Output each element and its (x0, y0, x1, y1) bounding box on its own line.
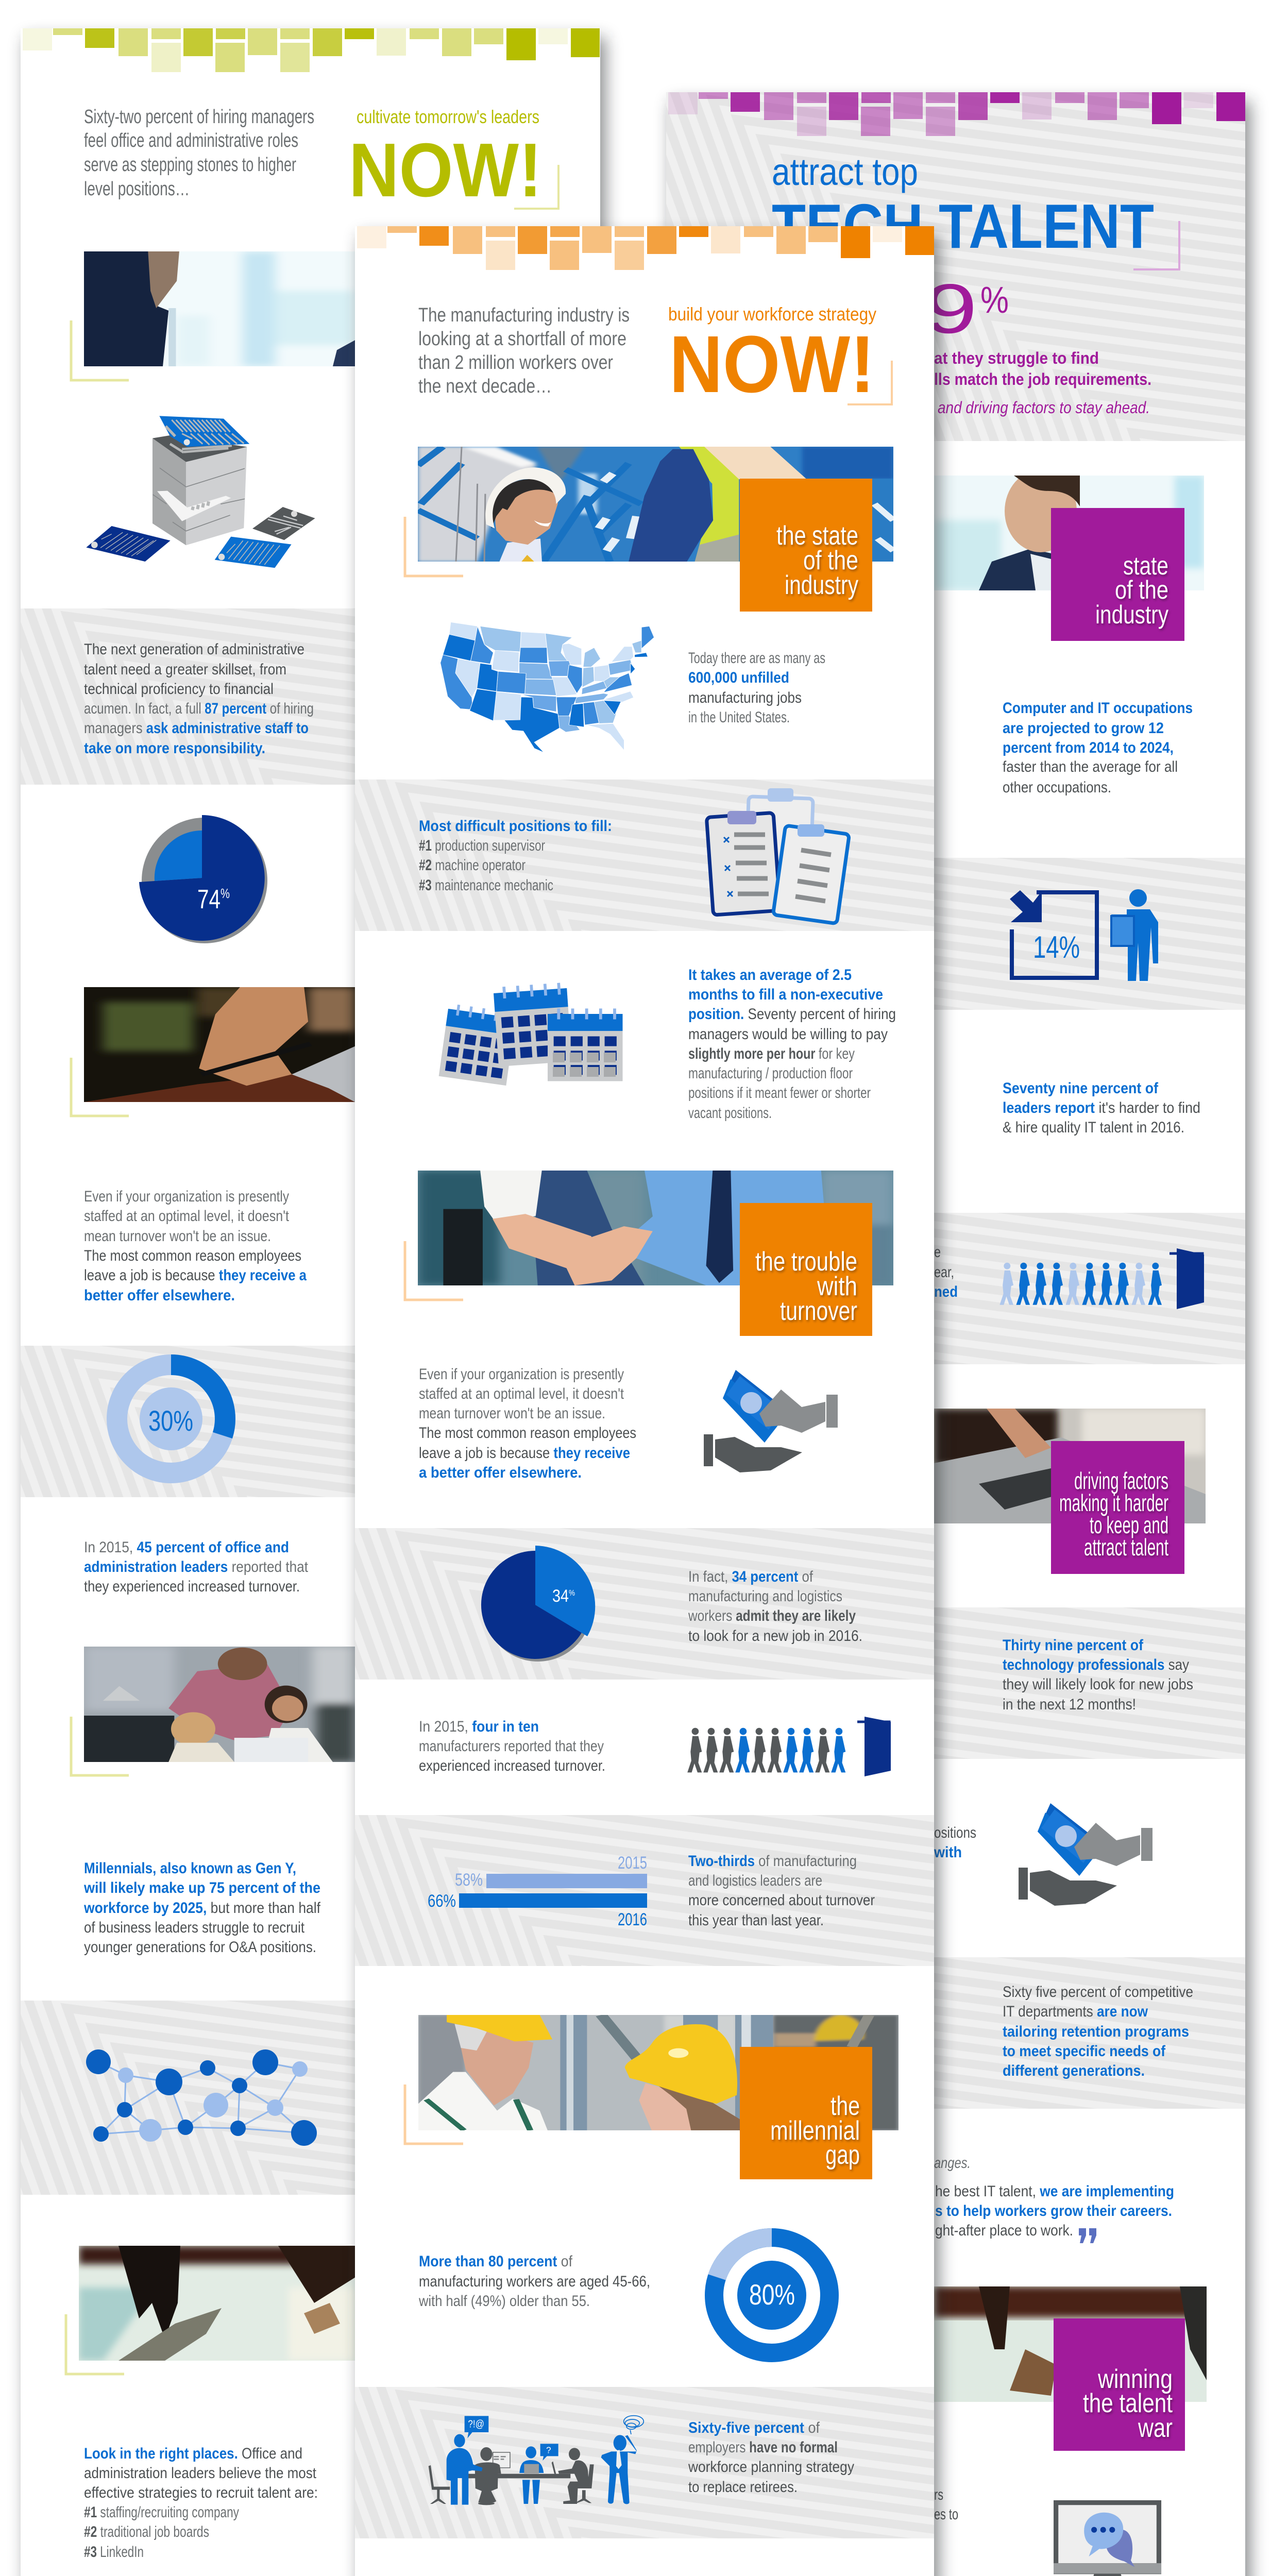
photo: worker with hard hat (418, 447, 893, 562)
text: IT occupations: percent from 2014 to 2024, (1003, 739, 1174, 756)
text: increased turnover: they experienced increased turnover. (84, 1578, 300, 1595)
section box: state of the industry: of the (1115, 575, 1168, 604)
text: purple intro fragments: lls match the job requirements. (934, 370, 1151, 388)
text: fragments beside monitor: es to (934, 2506, 958, 2523)
intro text: level positions… (84, 178, 190, 200)
intro text (418, 304, 630, 397)
text: millennials: younger generations for O&A positions. (84, 1939, 316, 1956)
panel: sixty-five percent no plan (355, 2387, 934, 2538)
text: IT occupations: Computer and IT occupations (1003, 700, 1193, 717)
stat: 89 percent: % (980, 280, 1009, 321)
section box: driving factors: making it harder (1059, 1489, 1168, 1516)
panel: sixty five percent: to meet specific needs of (1003, 2043, 1166, 2060)
text: time to fill: It takes an average of 2.5 (688, 967, 852, 984)
quote fragments (934, 2155, 1174, 2243)
text: turnover reason: The most common reason employees (84, 1247, 301, 1264)
text: look in the right places: #3 LinkedIn (84, 2544, 144, 2561)
section box: the state of the industry (740, 479, 872, 612)
pie chart: 74 percent: 74 (197, 885, 227, 914)
text: turnover reason: leave a job is because they receive (419, 1445, 630, 1462)
section box: the state of the industry: of the (803, 546, 858, 575)
bar chart: 2015 vs 2016: 2015 (618, 1853, 647, 1873)
intro text: serve as stepping stones to higher (84, 154, 296, 176)
stat: 89 percent: 89 (871, 269, 977, 348)
text: time to fill: vacant positions. (688, 1105, 772, 1122)
panel: people walking out: ned (934, 1283, 958, 1300)
pie chart: 74 percent (139, 815, 267, 943)
text: more than 80 percent: More than 80 percent of (419, 2253, 573, 2270)
section box: the state of the industry: the state (776, 521, 858, 551)
panel: 34 percent pie: In fact, 34 percent of (688, 1568, 814, 1585)
panel: 34 percent pie: manufacturing and logistics (688, 1588, 842, 1605)
pie chart: 34 percent (481, 1546, 595, 1662)
panel: 34 percent pie: to look for a new job in 2016. (688, 1628, 862, 1645)
icon: US map (440, 622, 654, 752)
heading: cultivate tomorrow's leaders NOW: NOW! (349, 128, 542, 213)
corner bracket (71, 1717, 129, 1775)
corner bracket (405, 1241, 463, 1300)
panel: two-thirds concern: and logistics leaders are (688, 1872, 822, 1889)
icon: workers walking out the door (687, 1717, 891, 1776)
text: turnover reason: The most common reason employees (419, 1425, 636, 1442)
panel: most difficult positions: #1 production supervisor (419, 837, 545, 854)
text: turnover reason: mean turnover won't be an issue. (84, 1228, 271, 1245)
text: 600,000 unfilled jobs (688, 650, 825, 726)
text: four in ten (419, 1718, 605, 1774)
text: seventy nine percent: Seventy nine percent of (1003, 1080, 1159, 1097)
text: purple intro fragments (934, 349, 1151, 417)
text: four in ten: experienced increased turnover. (419, 1757, 605, 1774)
icon: man with box (1111, 889, 1158, 981)
text: turnover reason: leave a job is because they receive a (84, 1267, 307, 1284)
text: time to fill: manufacturing / production floor (688, 1065, 853, 1082)
poster sheet (666, 92, 1245, 2576)
intro text: feel office and administrative roles (84, 130, 298, 151)
text: purple intro fragments: and driving factors to stay ahead. (938, 398, 1150, 417)
photo: laptop (934, 1409, 1206, 1523)
quote fragments: s to help workers grow their careers. (935, 2202, 1172, 2219)
text: fragments beside hands icon: with (934, 1844, 962, 1861)
donut chart: 80 percent (714, 2238, 829, 2353)
intro text: than 2 million workers over (418, 352, 613, 374)
icon: team meeting (429, 2416, 643, 2505)
section box: driving factors: attract talent (1084, 1534, 1168, 1561)
text: look in the right places: administration leaders believe the most (84, 2465, 317, 2482)
panel: 34 percent pie: workers admit they are likely (688, 1607, 856, 1624)
corner bracket (405, 2084, 463, 2144)
text: fragments beside monitor: rs (934, 2486, 943, 2503)
panel: two-thirds concern: this year than last year. (688, 1912, 824, 1929)
section box: the trouble with turnover: turnover (780, 1296, 857, 1326)
photo: handshake (418, 1171, 893, 1285)
pie chart: 34 percent: % (569, 1589, 575, 1598)
corner bracket (848, 361, 892, 404)
text: time to fill: positions if it meant fewer or shorter (688, 1084, 871, 1101)
text: seventy nine percent: & hire quality IT talent in 2016. (1003, 1119, 1184, 1136)
poster shadow (671, 101, 1250, 2576)
corner bracket (71, 320, 129, 380)
text: turnover reason: a better offer elsewhere. (419, 1464, 582, 1481)
panel: most difficult positions: #2 machine operator (419, 857, 526, 874)
icon: paper stack (86, 416, 315, 568)
corner bracket (1133, 221, 1179, 269)
photo: businessman (934, 476, 1204, 590)
text: turnover reason: better offer elsewhere. (84, 1287, 235, 1304)
text: look in the right places: effective strategies to recruit talent are: (84, 2484, 318, 2501)
panel: thirty nine percent (666, 1607, 1245, 1759)
photo: man at window (84, 251, 355, 366)
pie chart: 34 percent: 34 (552, 1586, 572, 1606)
panel: sixty-five percent no plan: Sixty-five percent of (688, 2419, 820, 2436)
panel: next generation skillset: The next generation of administrative (84, 641, 304, 658)
photo: hand on desk (84, 987, 355, 1102)
text: 600,000 unfilled jobs: in the United States. (688, 709, 790, 726)
text: fragments beside hands icon: ositions (934, 1824, 976, 1841)
panel: next generation skillset: technical proficiency to financial (84, 681, 274, 698)
section box: driving factors (1051, 1441, 1184, 1574)
panel: striped header (666, 92, 1245, 441)
corner bracket (71, 1058, 129, 1116)
text: turnover reason (84, 1188, 307, 1304)
icon: walking people (999, 1248, 1204, 1309)
panel: 14 percent (666, 858, 1245, 1010)
intro text: The manufacturing industry is (418, 304, 630, 326)
panel: sixty five percent (666, 1957, 1245, 2109)
panel: next generation skillset: managers ask administrative staff to (84, 720, 309, 737)
panel: centre poster, manufacturing (355, 226, 939, 2576)
bar chart: 2015 vs 2016: 58% (455, 1870, 483, 1890)
text: four in ten: manufacturers reported that they (419, 1738, 604, 1755)
text: time to fill: slightly more per hour for key (688, 1045, 855, 1062)
text: time to fill: position. Seventy percent of hiring (688, 1006, 896, 1023)
text: more than 80 percent (418, 2253, 650, 2310)
text: IT occupations: faster than the average for all (1003, 758, 1178, 775)
panel: sixty-five percent no plan: employers have no formal (688, 2439, 838, 2456)
intro text: Sixty-two percent of hiring managers (84, 106, 314, 128)
heading: attract top tech talent: attract top (772, 150, 918, 193)
heading: build your workforce strategy NOW: NOW! (669, 319, 875, 410)
text: millennials (83, 1860, 321, 1956)
panel: thirty nine percent: technology professionals say (1003, 1656, 1189, 1673)
panel: two-thirds concern (355, 1815, 934, 1966)
donut chart: 80 percent: 80% (749, 2278, 795, 2311)
header squares: purple (668, 92, 1245, 136)
panel: most difficult positions: #3 maintenance mechanic (419, 877, 553, 894)
bar chart: 2015 vs 2016: 2016 (618, 1910, 647, 1929)
section box: driving factors: to keep and (1090, 1512, 1168, 1538)
panel: people walking out (666, 1213, 1245, 1364)
icon: hands exchanging money (1019, 1803, 1153, 1906)
panel: two-thirds concern: more concerned about turnover (688, 1892, 875, 1909)
text: IT occupations (1003, 700, 1193, 796)
panel: next generation skillset: acumen. In fact, a full 87 percent of hiring (84, 700, 314, 717)
text: increased turnover: In 2015, 45 percent of office and (84, 1539, 289, 1556)
text: look in the right places: #1 staffing/recruiting company (84, 2504, 239, 2521)
heading: attract top tech talent: TECH TALENT (772, 191, 1154, 261)
text: turnover reason: Even if your organization is presently (419, 1366, 624, 1383)
heading: build your workforce strategy NOW: build your workforce strategy (668, 303, 876, 325)
photo: office team (84, 1647, 355, 1762)
poster shadow (360, 235, 939, 2576)
panel: sixty five percent: different generations. (1003, 2062, 1145, 2079)
text: time to fill: months to fill a non-executive (688, 986, 883, 1003)
section box: the trouble with turnover: the trouble (755, 1247, 857, 1277)
text: turnover reason: staffed at an optimal level, it doesn't (84, 1208, 290, 1225)
text: millennials: Millennials, also known as Gen Y, (84, 1860, 296, 1877)
corner bracket (405, 517, 463, 576)
heading: cultivate tomorrow's leaders NOW: cultivate tomorrow's leaders (357, 106, 539, 127)
text: four in ten: In 2015, four in ten (419, 1718, 539, 1735)
corner bracket (514, 165, 558, 209)
stat: 89 percent (871, 269, 1009, 348)
pie chart: 74 percent: % (221, 886, 230, 901)
quote fragments: he best IT talent, we are implementing (935, 2183, 1174, 2200)
panel: next generation skillset (21, 608, 600, 785)
panel: sixty-five percent no plan: workforce planning strategy (688, 2459, 854, 2476)
panel: thirty nine percent: in the next 12 months! (1003, 1696, 1136, 1713)
heading: attract top tech talent (772, 150, 1154, 261)
icon: monitor with chat (1054, 2500, 1161, 2576)
text: IT occupations: other occupations. (1003, 779, 1111, 796)
panel: thirty nine percent: they will likely look for new jobs (1003, 1676, 1193, 1693)
text: time to fill: managers would be willing to pay (688, 1026, 888, 1043)
text: more than 80 percent: with half (49%) older than 55. (418, 2293, 590, 2310)
section box: the millennial gap: the (831, 2091, 860, 2121)
text: 600,000 unfilled jobs: Today there are as many as (688, 650, 825, 667)
section box: the millennial gap: gap (825, 2140, 860, 2170)
text: 600,000 unfilled jobs: 600,000 unfilled (688, 669, 789, 686)
section box: the state of the industry: industry (785, 570, 858, 600)
panel: next generation skillset: talent need a greater skillset, from (84, 661, 286, 678)
text: time to fill (688, 967, 896, 1122)
section box: winning the talent war: war (1138, 2413, 1173, 2443)
text: increased turnover (84, 1539, 309, 1595)
section box: the trouble with turnover: with (817, 1272, 857, 1301)
panel: 34 percent pie (355, 1528, 934, 1680)
section box: driving factors: driving factors (1074, 1467, 1168, 1494)
icon: team meeting: ? (546, 2445, 551, 2455)
text: look in the right places (84, 2445, 318, 2561)
panel: next generation skillset: take on more responsibility. (84, 740, 265, 757)
text: purple intro fragments: at they struggle to find (934, 349, 1099, 367)
bar chart: 2015 vs 2016: 66% (428, 1891, 456, 1911)
text: IT occupations: are projected to grow 12 (1003, 720, 1164, 737)
text: millennials: workforce by 2025, but more than half (83, 1900, 321, 1917)
poster sheet (355, 226, 934, 2576)
text: turnover reason (419, 1366, 636, 1481)
icon: hands exchanging money (704, 1370, 838, 1472)
text: fragments beside monitor (934, 2486, 958, 2523)
section box: state of the industry: industry (1095, 600, 1168, 629)
header squares: orange (357, 226, 934, 270)
text: seventy nine percent (1003, 1080, 1200, 1136)
panel: right poster, tech talent (666, 92, 1250, 2576)
quote fragments: anges. (934, 2155, 971, 2172)
section box: winning the talent war (1054, 2318, 1185, 2451)
text: 600,000 unfilled jobs: manufacturing jobs (688, 689, 802, 706)
panel: 30 percent donut (21, 1346, 600, 1497)
text: millennials: will likely make up 75 percent of the (83, 1879, 320, 1896)
icon: team meeting: ?!@ (468, 2419, 484, 2430)
text: look in the right places: #2 traditional job boards (84, 2523, 209, 2540)
bar chart: 2015 vs 2016 (428, 1853, 647, 1929)
text: millennials: of business leaders struggle to recruit (84, 1919, 305, 1936)
panel: most difficult positions: Most difficult positions to fill: (419, 818, 612, 835)
text: increased turnover: administration leaders reported that (84, 1558, 309, 1575)
text: turnover reason: mean turnover won't be an issue. (419, 1405, 605, 1422)
panel: social network (21, 2001, 600, 2195)
section box: state of the industry: state (1123, 551, 1168, 580)
text: fragments beside hands icon (934, 1824, 976, 1861)
poster shadow (26, 38, 605, 2576)
panel: left poster, administrative talent (21, 28, 605, 2576)
panel: thirty nine percent: Thirty nine percent of (1003, 1637, 1144, 1654)
section box: state of the industry (1051, 508, 1184, 641)
text: turnover reason: staffed at an optimal level, it doesn't (419, 1385, 624, 1402)
text: more than 80 percent: manufacturing workers are aged 45-66, (419, 2273, 650, 2290)
text: seventy nine percent: leaders report it's harder to find (1003, 1099, 1200, 1116)
header squares: lime (23, 28, 600, 72)
panel: two-thirds concern: Two-thirds of manufacturing (688, 1853, 857, 1870)
text: look in the right places: Look in the right places. Office and (84, 2445, 302, 2462)
panel: sixty-five percent no plan: to replace retirees. (688, 2479, 798, 2496)
panel: people walking out: e (934, 1244, 941, 1261)
text: turnover reason: Even if your organization is presently (84, 1188, 289, 1205)
photo: commuters (934, 2286, 1207, 2402)
intro text (84, 106, 314, 200)
corner bracket (66, 2314, 124, 2374)
photo: commuters (79, 2246, 355, 2361)
section box: the millennial gap (740, 2047, 872, 2179)
panel: sixty five percent: Sixty five percent of competitive (1003, 1984, 1193, 2001)
icon: network (86, 2049, 317, 2146)
panel: people walking out: ear, (934, 1264, 954, 1281)
icon: calendars (439, 982, 622, 1086)
panel: sixty five percent: tailoring retention programs (1003, 2023, 1189, 2040)
section box: the trouble with turnover (740, 1203, 872, 1336)
quote fragments: ght-after place to work. (935, 2222, 1073, 2239)
section box: winning the talent war: winning (1097, 2364, 1173, 2394)
photo: older and younger worker (418, 2015, 899, 2130)
icon: clipboards (706, 788, 850, 924)
section box: winning the talent war: the talent (1083, 2388, 1173, 2418)
panel: most difficult positions (355, 779, 934, 931)
panel: sixty five percent: IT departments are now (1003, 2003, 1148, 2020)
intro text: looking at a shortfall of more (418, 328, 626, 350)
intro text: the next decade… (418, 376, 552, 397)
panel: 30 percent donut: 30% (148, 1404, 193, 1437)
poster sheet (21, 28, 600, 2576)
panel: 14 percent: 14% (1033, 930, 1080, 964)
section box: the millennial gap: millennial (770, 2116, 860, 2146)
